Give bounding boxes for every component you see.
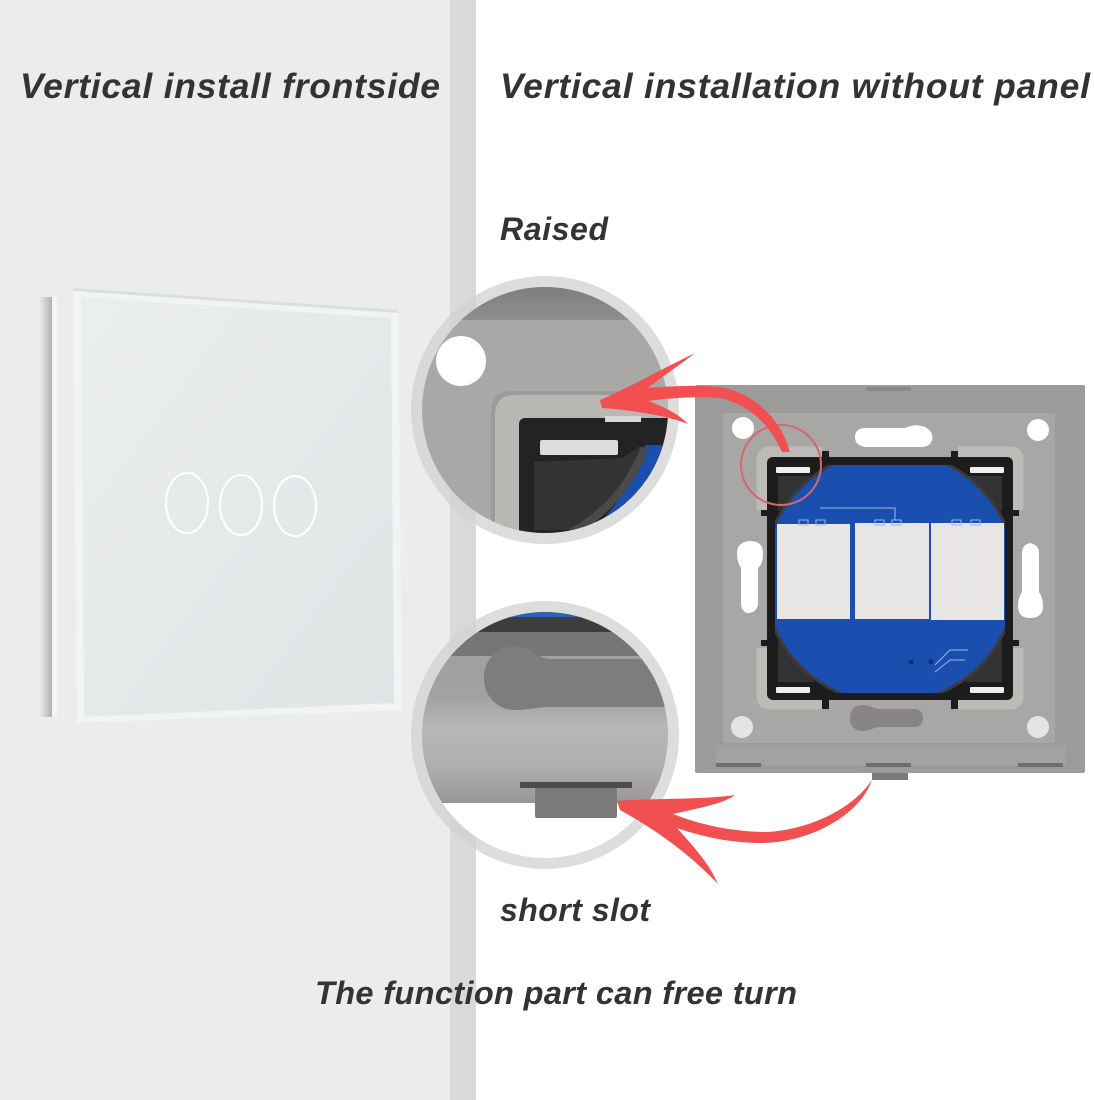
magnifier circle: raised corner	[411, 276, 679, 544]
bottom slot	[850, 705, 923, 731]
left slot	[737, 541, 763, 613]
keyhole slot	[484, 656, 665, 710]
slot tab	[520, 782, 632, 788]
grey mounting frame	[695, 385, 1085, 773]
red arrow to short slot	[617, 780, 872, 884]
corner lips	[762, 452, 1018, 704]
touch button 1	[166, 473, 208, 533]
back plate with function module	[695, 385, 1085, 780]
magnifier circle: short slot	[410, 601, 680, 873]
white pad 1	[777, 524, 850, 619]
board contacts	[799, 508, 980, 672]
mounting hole	[436, 336, 486, 386]
label: raised: Raised	[500, 211, 609, 247]
left background panel	[0, 0, 450, 1100]
white pad 2	[855, 523, 929, 619]
silver corner slots	[776, 467, 810, 473]
label: short slot: short slot	[500, 892, 651, 928]
central vertical band	[450, 0, 476, 1100]
top slot	[855, 425, 932, 447]
blue circuit board	[775, 465, 1005, 693]
caption: the function part can free turn: The function part can free turn	[315, 975, 797, 1011]
glass touch switch front view	[40, 288, 402, 723]
corner clips	[822, 451, 829, 465]
heading: vertical installation without panel: Vertical installation without panel	[500, 66, 1091, 106]
mounting holes	[732, 417, 754, 439]
glass face	[81, 297, 394, 717]
white pad 3	[931, 523, 1004, 620]
right background panel	[476, 0, 1094, 1100]
red arrow to raised corner	[600, 353, 790, 452]
heading: vertical install frontside: Vertical install frontside	[20, 66, 440, 106]
black housing	[767, 457, 1013, 700]
bottom tab	[872, 773, 908, 780]
red highlight ring	[741, 425, 821, 505]
touch button 2	[220, 475, 262, 535]
touch button 3	[274, 476, 316, 536]
wall shadow strip	[40, 297, 52, 717]
right slot	[1018, 543, 1043, 618]
